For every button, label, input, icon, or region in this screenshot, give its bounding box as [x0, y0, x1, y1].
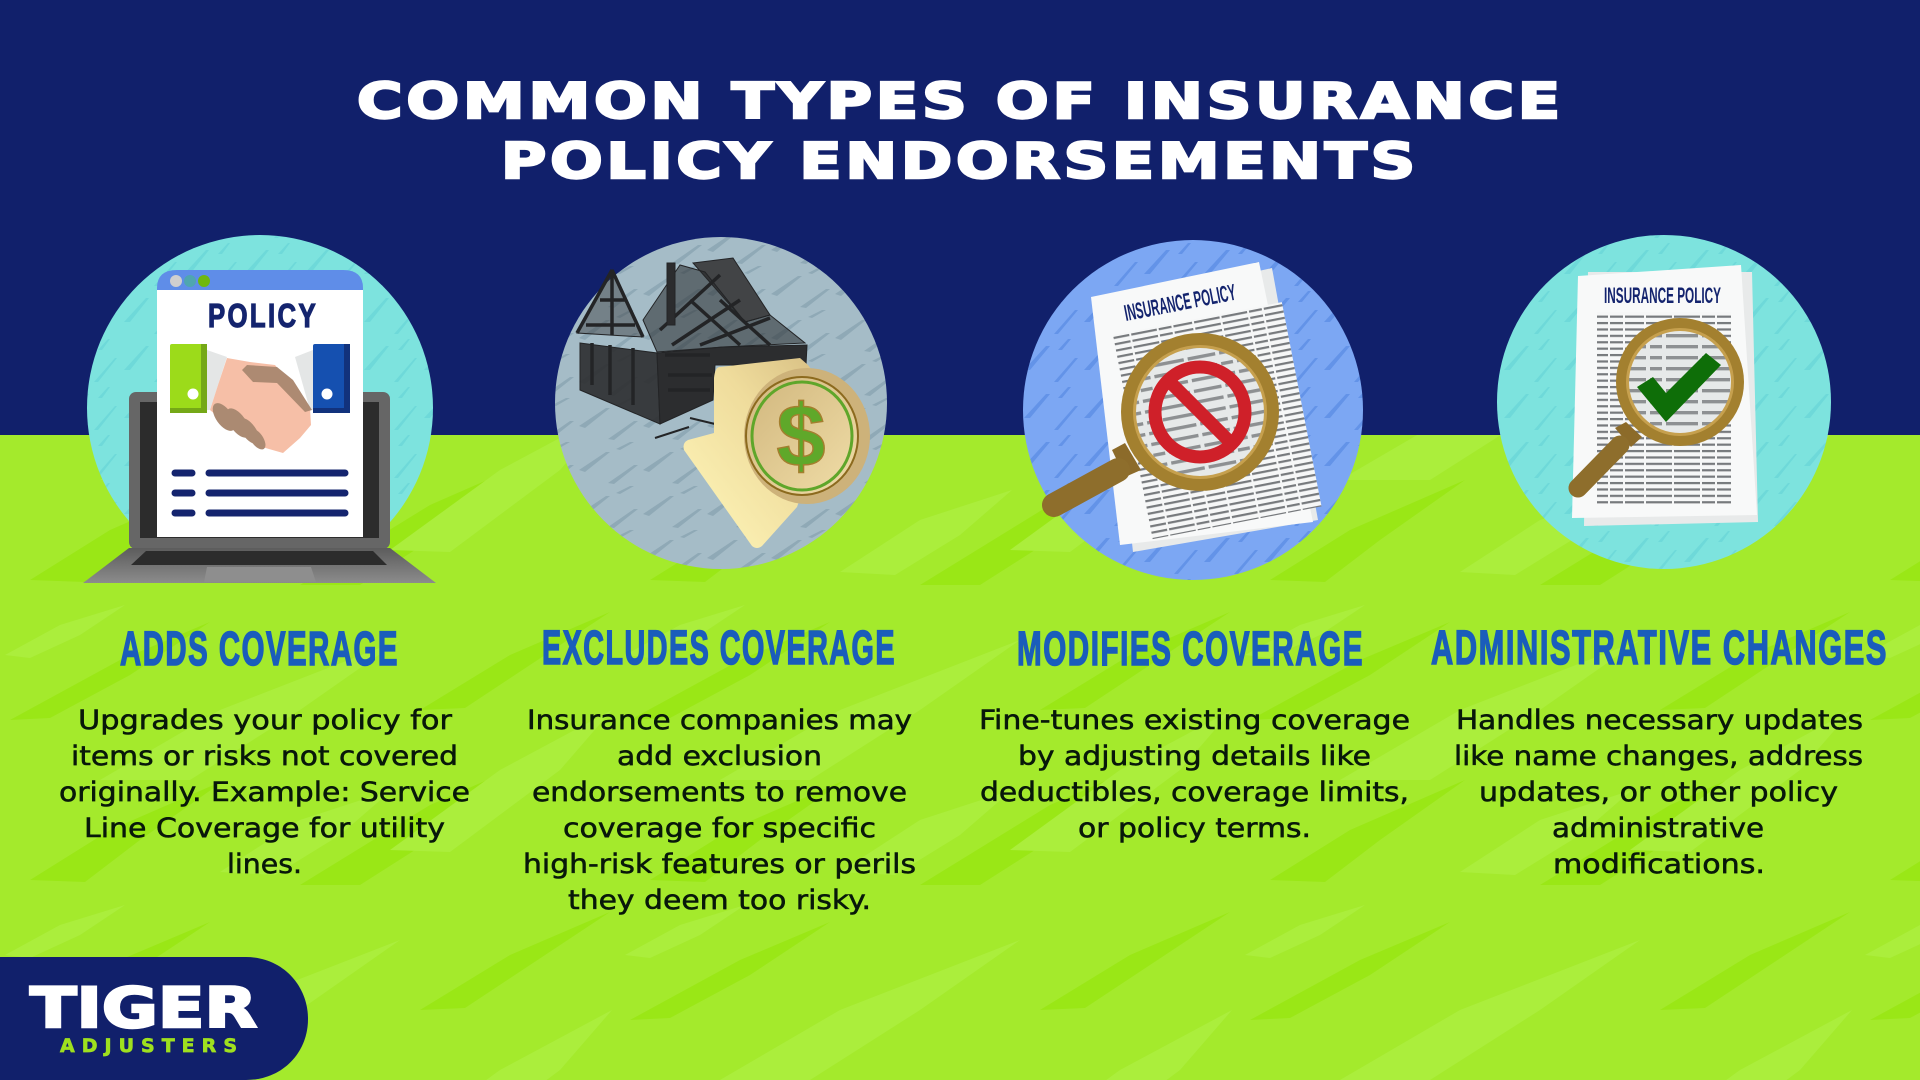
text block: administrative changes: updates, or other policy	[1479, 777, 1838, 808]
icon: burnt house with falling dollar arrow: $	[777, 386, 825, 485]
text block: administrative changes	[1454, 705, 1863, 880]
heading: modifies coverage: MODIFIES COVERAGE	[1017, 623, 1364, 676]
text block: adds coverage	[59, 705, 470, 880]
text block: excludes coverage: they deem too risky.	[568, 885, 871, 916]
heading: excludes coverage: EXCLUDES COVERAGE	[542, 622, 896, 675]
icon: policy under magnifier with prohibition sign	[1023, 240, 1363, 580]
icon: laptop with policy and handshake	[83, 235, 436, 583]
text block: adds coverage: lines.	[227, 849, 302, 880]
icon: laptop with policy and handshake: POLICY	[208, 297, 318, 334]
text block: modifies coverage: Fine-tunes existing coverage	[979, 705, 1410, 736]
title	[357, 73, 1564, 190]
text block: adds coverage: Line Coverage for utility	[84, 813, 445, 844]
text block: excludes coverage: endorsements to remove	[532, 777, 907, 808]
icon: burnt house with falling dollar arrow	[555, 237, 887, 569]
text block: administrative changes: modifications.	[1553, 849, 1765, 880]
text block: modifies coverage: or policy terms.	[1078, 813, 1311, 844]
text block: adds coverage: Upgrades your policy for	[78, 705, 453, 736]
text block: excludes coverage: add exclusion	[617, 741, 822, 772]
background: green textured band	[0, 435, 1920, 1080]
icon: policy under magnifier with green check: INSURANCE POLICY	[1604, 283, 1721, 308]
logo: Tiger Adjusters: TIGER	[30, 976, 257, 1040]
text block: modifies coverage: deductibles, coverage limits,	[980, 777, 1409, 808]
title: COMMON TYPES OF INSURANCE	[357, 73, 1564, 130]
text block: modifies coverage	[979, 705, 1410, 844]
text block: administrative changes: Handles necessary updates	[1456, 705, 1863, 736]
heading: adds coverage: ADDS COVERAGE	[120, 623, 399, 676]
background: navy top band	[0, 0, 1920, 436]
text block: administrative changes: administrative	[1552, 813, 1764, 844]
title: POLICY ENDORSEMENTS	[501, 133, 1419, 190]
icon: policy under magnifier with green check	[1497, 235, 1831, 569]
text block: administrative changes: like name changes, address	[1454, 741, 1863, 772]
text block: excludes coverage	[523, 705, 916, 916]
text block: modifies coverage: by adjusting details like	[1018, 741, 1371, 772]
text block: adds coverage: items or risks not covered	[71, 741, 458, 772]
logo: Tiger Adjusters	[0, 957, 308, 1080]
text block: excludes coverage: Insurance companies may	[527, 705, 912, 736]
text block: excludes coverage: coverage for specific	[563, 813, 876, 844]
icon: policy under magnifier with prohibition sign: INSURANCE POLICY	[1122, 279, 1238, 326]
text block: adds coverage: originally. Example: Service	[59, 777, 470, 808]
logo: Tiger Adjusters: ADJUSTERS	[60, 1035, 237, 1057]
text block: excludes coverage: high-risk features or perils	[523, 849, 916, 880]
